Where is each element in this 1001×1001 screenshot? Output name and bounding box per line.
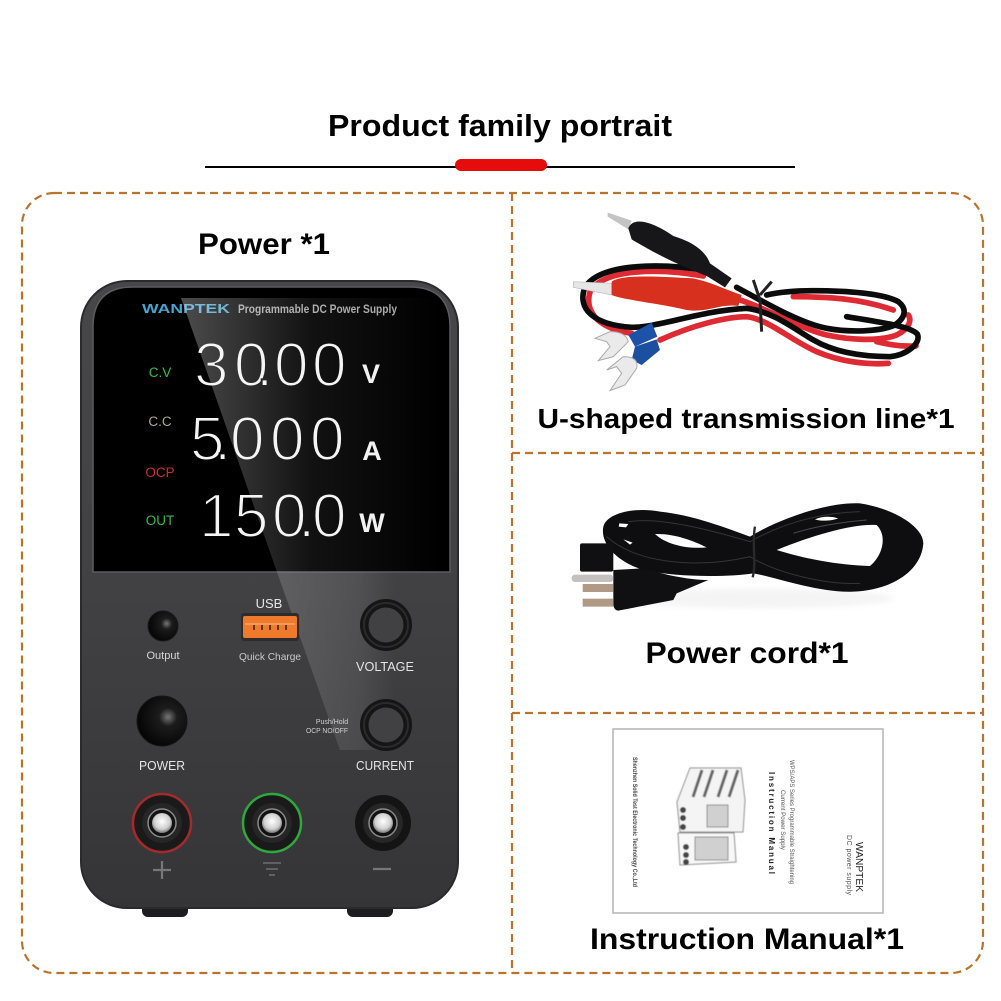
usb port: USB [256, 596, 282, 611]
voltage knob [356, 599, 414, 674]
current reading: 5.000 [190, 405, 344, 474]
plug body [613, 568, 708, 611]
cord highlights [607, 512, 867, 583]
unit letters [359, 359, 385, 538]
status labels: C.V [149, 365, 171, 380]
device feet [142, 900, 393, 917]
panel: dashed package frame with dividers [22, 193, 983, 973]
image: test leads with alligator clips and fork terminals [573, 213, 918, 391]
cord shadow [627, 588, 893, 608]
output button [146, 611, 180, 662]
output button: Output [146, 650, 180, 662]
manual brand line: WANPTEK [853, 842, 864, 892]
red clip [573, 276, 742, 311]
power button: POWER [139, 758, 185, 773]
brand line: Programmable DC Power Supply [238, 302, 397, 316]
heading: power: Power *1 [198, 228, 330, 261]
usb port: Quick Charge [239, 651, 301, 663]
unit letters: W [359, 508, 385, 538]
current knob: CURRENT [356, 758, 414, 773]
voltage knob: VOLTAGE [356, 659, 414, 674]
voltage reading: 30.00 [194, 331, 346, 400]
manual title line: Instruction Manual [767, 772, 776, 874]
panel glare [277, 572, 395, 750]
usb port [239, 596, 301, 663]
current knob [306, 699, 414, 773]
fork terminals [595, 323, 660, 391]
manual line illustration [677, 768, 745, 865]
image: instruction manual booklet [613, 729, 883, 913]
manual series line: WPS/APS Series Programmable Straightening [788, 760, 795, 884]
brand line [142, 301, 397, 316]
status labels: OCP [145, 465, 175, 480]
label: instruction manual: Instruction Manual*1 [590, 923, 904, 956]
unit letters: A [362, 436, 382, 466]
cord coils [603, 503, 923, 592]
device body [81, 281, 458, 908]
red wires [589, 271, 916, 364]
screen bezel and display [93, 287, 450, 572]
image: coiled power cord with plug [572, 503, 923, 611]
black clip [608, 213, 732, 287]
cord gaps [619, 517, 883, 566]
title: Product family portrait [328, 108, 672, 143]
power button [137, 696, 187, 773]
iec connector [580, 543, 613, 572]
unit letters: V [362, 359, 380, 389]
power reading: 150.0 [199, 482, 346, 551]
manual subtitle line: Current Power Supply [779, 790, 786, 851]
cord tie [753, 527, 755, 577]
manual product line: DC power supply [845, 835, 852, 896]
ground terminal [243, 794, 301, 875]
brand line: WANPTEK [142, 301, 231, 316]
label: test leads: U-shaped transmission line*1 [538, 403, 954, 434]
positive terminal [133, 794, 191, 879]
title underline with red accent [205, 159, 795, 171]
current knob: Push/Hold [316, 719, 348, 726]
manual page [613, 729, 883, 913]
status labels: OUT [146, 513, 174, 528]
status labels [145, 365, 175, 528]
current knob: OCP NO/OFF [306, 728, 348, 735]
cable tie [753, 280, 772, 332]
status labels: C.C [148, 414, 172, 429]
manual company line: Shenzhen Solid Test Electronic Technology Co.,Ltd [631, 757, 637, 887]
screen glare [181, 298, 440, 572]
negative terminal [355, 795, 411, 869]
panel: power supply device [81, 281, 458, 917]
black wires [583, 266, 918, 357]
plug prongs [572, 575, 613, 607]
label: power cord: Power cord*1 [646, 637, 848, 670]
